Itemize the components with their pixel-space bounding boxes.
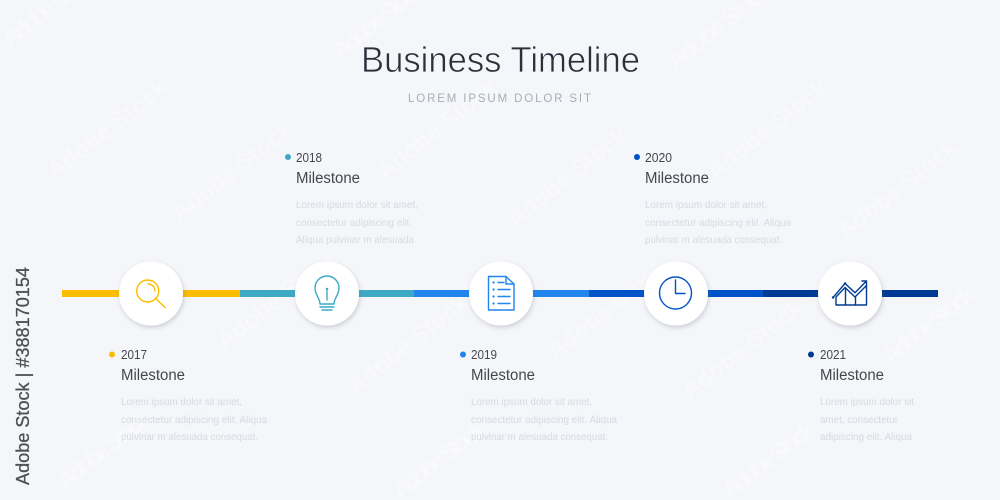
icon: growth chart (833, 281, 866, 305)
milestone 2018: Lorem ipsum dolor sit amet, (296, 199, 418, 211)
milestone 2021 (808, 347, 914, 443)
milestone 2018: consectetur adipiscing elit. (296, 217, 412, 229)
watermark pattern: Adobe Stock (877, 280, 981, 370)
milestone 2017: Milestone (121, 367, 185, 384)
milestone 2017 (109, 347, 267, 443)
watermark pattern: Adobe Stock (542, 254, 673, 365)
milestone 2020: Lorem ipsum dolor sit amet, (645, 199, 767, 211)
node: 2018 light bulb (295, 262, 359, 326)
title: Business Timeline (361, 39, 640, 80)
milestone 2019 (460, 347, 617, 443)
node: 2021 chart (818, 262, 882, 326)
milestone 2019: pulvinar m alesuada consequat. (471, 431, 608, 443)
milestone 2017: pulvinar m alesuada consequat. (121, 431, 258, 443)
milestone 2017: 2017 (121, 347, 147, 362)
stock credit: Adobe Stock | #388170154 (13, 267, 33, 485)
milestone 2018: Aliqua pulvinar m alesuada (296, 234, 414, 246)
milestone 2020 (634, 150, 791, 246)
milestone 2021: amet, consectetur (820, 414, 898, 426)
watermark pattern: Adobe Stock (677, 294, 808, 405)
milestone 2017: consectetur adipiscing elit. Aliqua (121, 414, 267, 426)
watermark pattern: Adobe Stock (832, 134, 963, 245)
watermark pattern: Adobe Stock (372, 74, 503, 185)
watermark pattern: Adobe Stock (212, 244, 343, 355)
milestone 2018 (285, 150, 418, 246)
milestone 2018: Milestone (296, 170, 360, 187)
watermark pattern: Adobe Stock (167, 116, 298, 227)
node: 2017 magnifier (119, 262, 183, 326)
milestone 2019: Lorem ipsum dolor sit amet, (471, 396, 592, 408)
icon: document checklist (488, 276, 514, 310)
milestone 2021: 2021 (820, 347, 846, 362)
milestone 2019: consectetur adipiscing elit. Aliqua (471, 414, 617, 426)
icon: clock (660, 277, 692, 309)
watermark pattern: Adobe Stock (52, 405, 156, 495)
node: 2020 clock (644, 262, 708, 326)
milestone 2018: 2018 (296, 150, 322, 165)
milestone 2021: Milestone (820, 367, 884, 384)
milestone 2020: Milestone (645, 170, 709, 187)
watermark pattern: Adobe Stock (502, 122, 633, 233)
watermark pattern: Adobe Stock (342, 289, 473, 400)
node: 2019 document (469, 262, 533, 326)
timeline bar (62, 290, 938, 297)
milestone 2020: consectetur adipiscing elit. Aliqua (645, 217, 791, 229)
watermark pattern: Adobe Stock (42, 74, 173, 185)
milestone 2017: Lorem ipsum dolor sit amet, (121, 396, 242, 408)
milestone 2020: 2020 (645, 150, 672, 165)
milestone 2019: 2019 (471, 347, 497, 362)
milestone 2021: adipiscing elit. Aliqua (820, 431, 912, 443)
subtitle: LOREM IPSUM DOLOR SIT (408, 93, 591, 105)
milestone 2020: pulvinar m alesuada consequat. (645, 234, 782, 246)
icon: light bulb (315, 276, 339, 310)
watermark pattern: Adobe Stock (702, 74, 833, 185)
milestone 2021: Lorem ipsum dolor sit (820, 396, 914, 408)
icon: magnifying glass (137, 280, 165, 308)
milestone 2019: Milestone (471, 367, 535, 384)
